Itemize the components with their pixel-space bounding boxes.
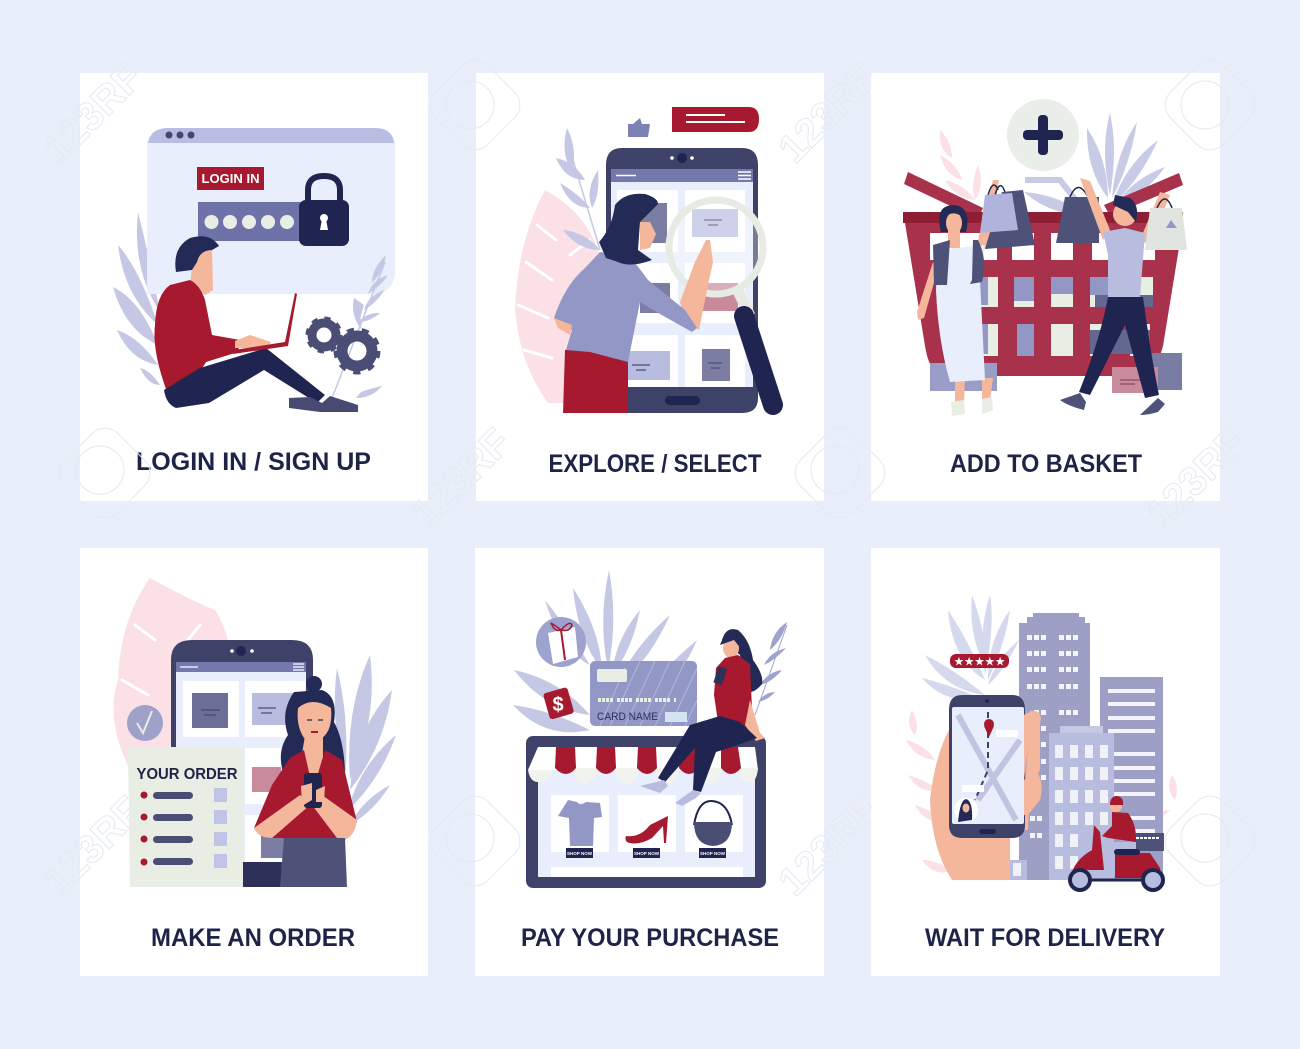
watermarks [35,53,1262,904]
watermarks: 123RF [35,55,151,171]
panel: explore / select [476,73,824,501]
button: shop now: SHOP NOW [634,851,660,856]
title: EXPLORE / SELECT [548,450,762,478]
icon: credit card: CARD NAME [597,711,658,723]
panel: wait for delivery [871,548,1220,976]
button: shop now [566,848,593,858]
callout: speech bubble [672,107,759,132]
device: smartphone [606,148,758,413]
icon: check circle [127,705,163,741]
icon: pink branches [906,710,1177,872]
password field [198,202,302,241]
icon: browser window [147,128,395,294]
badge: five star rating: ★★★★★ [954,654,1006,668]
watermarks: 123RF [403,420,519,536]
title: WAIT FOR DELIVERY [925,924,1165,952]
button: shop now [699,848,726,858]
figure: seated woman [640,629,765,806]
icon: high heel [626,816,668,843]
icon: shopping bag centre [1056,188,1099,243]
button: login in: LOGIN IN [202,171,260,186]
figure: man with bags [1060,178,1170,415]
icon: city buildings [1010,613,1163,880]
icon: hand holding phone [930,695,1042,880]
icon: boxes on the floor [930,353,1182,393]
panel: make an order [80,548,428,976]
icon: padlock [299,176,349,246]
icon: pink monstera leaf [114,578,231,770]
icon: pink monstera leaf [515,190,601,403]
title: MAKE AN ORDER [151,924,355,952]
icon: basket [903,172,1183,376]
panel: your order list [128,747,244,887]
figure: woman with bags [917,180,999,416]
watermarks: 123RF [1138,420,1254,536]
icon: shopping bag right [1145,199,1187,250]
icon: thumbs up [628,118,650,137]
title: PAY YOUR PURCHASE [521,924,779,952]
icon: pink branch [940,130,981,200]
watermarks: 123RF [35,788,151,904]
icon: lavender branch [556,128,600,250]
icon: dollar tag: $ [552,694,564,716]
icon: right branch [755,622,787,715]
title: LOGIN IN / SIGN UP [136,448,371,476]
figure: woman with phone [243,676,357,887]
panel: add to basket [871,73,1220,501]
icon: handbag [694,801,732,846]
panel: your order list: YOUR ORDER [136,766,238,783]
device: tablet shop [526,736,766,888]
icon: gift circle [536,617,586,667]
icon: lavender leaves [1024,113,1165,215]
icon: lavender leaves [922,595,1019,701]
icon: left foliage [113,212,171,385]
figure: man with laptop [154,236,358,412]
title: ADD TO BASKET [950,450,1142,478]
icon: right branch [332,255,388,398]
button: shop now: SHOP NOW [700,851,726,856]
icon: lavender leaves [513,570,697,732]
button: login in [197,167,264,190]
watermarks: 123RF [770,788,886,904]
icon: credit card [590,661,697,726]
panel: login in / sign up [80,73,428,501]
icon: dollar tag [543,687,574,720]
device: smartphone [171,640,313,887]
icon: plus circle [1007,99,1079,171]
icon: t-shirt [558,800,602,846]
figure: woman pointing [554,194,713,413]
watermarks: 123RF [770,55,886,171]
icon: shopping bags left [980,185,1035,249]
button: shop now [633,848,660,858]
button: shop now: SHOP NOW [567,851,593,856]
figure: scooter courier [1070,796,1164,890]
icon: magnifying glass [669,200,773,405]
icon: lavender leaves [335,655,396,825]
panel: pay your purchase [475,548,824,976]
icon: gears [308,319,378,372]
